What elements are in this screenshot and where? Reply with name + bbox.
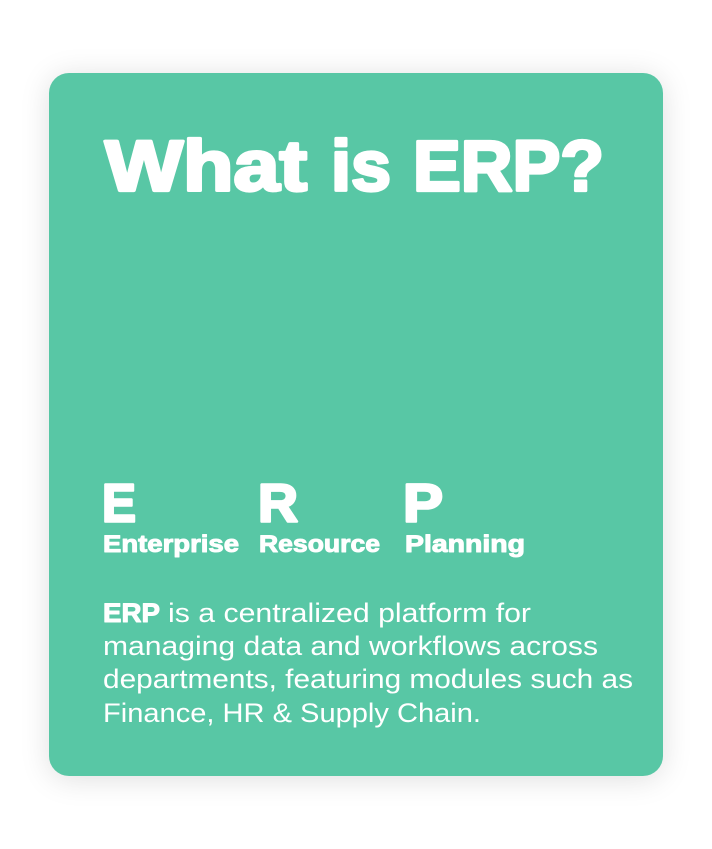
description text block: Finance, HR & Supply Chain. xyxy=(103,698,481,728)
title: is xyxy=(331,128,391,206)
panel: ERP card xyxy=(49,73,663,776)
acronym breakdown xyxy=(102,474,525,558)
letter R: Resource: R xyxy=(258,474,298,534)
letter P: Planning xyxy=(403,474,525,558)
title: What xyxy=(105,128,307,206)
title: ERP? xyxy=(413,128,604,206)
description text block: departments, featuring modules such as xyxy=(103,664,633,694)
letter R: Resource xyxy=(258,474,380,558)
title xyxy=(105,128,604,206)
description text block xyxy=(103,598,633,728)
letter R: Resource: Resource xyxy=(259,531,380,558)
letter E: Enterprise: Enterprise xyxy=(103,531,239,558)
letter E: Enterprise: E xyxy=(102,474,136,534)
letter E: Enterprise xyxy=(102,474,239,558)
letter P: Planning: Planning xyxy=(405,531,525,558)
letter P: Planning: P xyxy=(403,474,443,534)
description text block: ERP xyxy=(103,598,160,628)
description text block: managing data and workflows across xyxy=(103,631,598,661)
description text block: is a centralized platform for xyxy=(168,598,531,628)
